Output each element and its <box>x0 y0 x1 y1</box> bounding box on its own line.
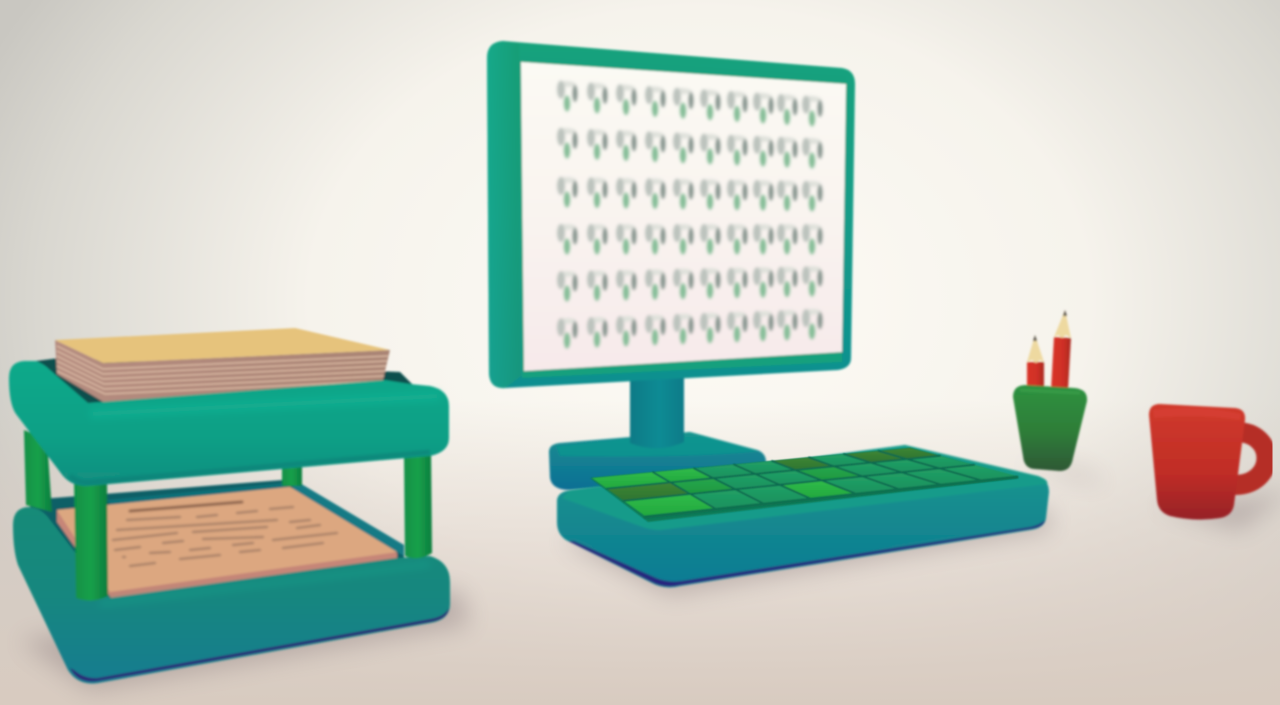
short pencil <box>1027 335 1044 390</box>
pencil holder <box>1013 310 1087 471</box>
monitor: frame <box>487 41 855 388</box>
keyboard: middle row keys <box>607 456 974 501</box>
tray: upper opening <box>36 358 414 404</box>
lower paper sheet <box>57 487 397 598</box>
keyboard: key seams <box>607 451 1017 517</box>
tray: front right leg <box>404 450 432 558</box>
green cup <box>1013 385 1087 471</box>
tray: back right leg <box>282 462 302 486</box>
paper text lines <box>113 502 337 566</box>
paper stack <box>55 328 390 403</box>
tray: upper frame <box>9 361 449 486</box>
screen: icon grid <box>557 80 823 349</box>
keyboard: keys <box>592 448 1017 517</box>
tall pencil <box>1051 310 1071 390</box>
monitor: screen <box>521 62 846 371</box>
icon row 3 <box>557 177 823 212</box>
icon row 1 <box>557 80 823 127</box>
mug body <box>1149 404 1245 520</box>
monitor: stand <box>630 376 684 448</box>
icon row 6 <box>557 309 823 349</box>
floor shadows <box>20 465 1280 690</box>
monitor: base <box>549 432 766 490</box>
icon row 4 <box>557 224 823 254</box>
mug handle <box>1234 432 1267 485</box>
tray: lower base <box>13 507 450 683</box>
icon row 2 <box>557 128 823 169</box>
keyboard: back row keys <box>592 448 940 489</box>
tray: front left leg <box>74 480 108 601</box>
tray: back left leg <box>24 430 52 512</box>
keyboard: body <box>557 445 1049 587</box>
monitor <box>487 41 855 490</box>
letter tray <box>9 328 450 683</box>
keyboard <box>557 445 1049 587</box>
icon row 5 <box>557 266 823 302</box>
coffee mug <box>1149 404 1267 520</box>
keyboard: front row keys <box>624 465 1017 516</box>
tray: lower back rim <box>28 480 404 602</box>
keyboard: key plate <box>590 448 1019 522</box>
